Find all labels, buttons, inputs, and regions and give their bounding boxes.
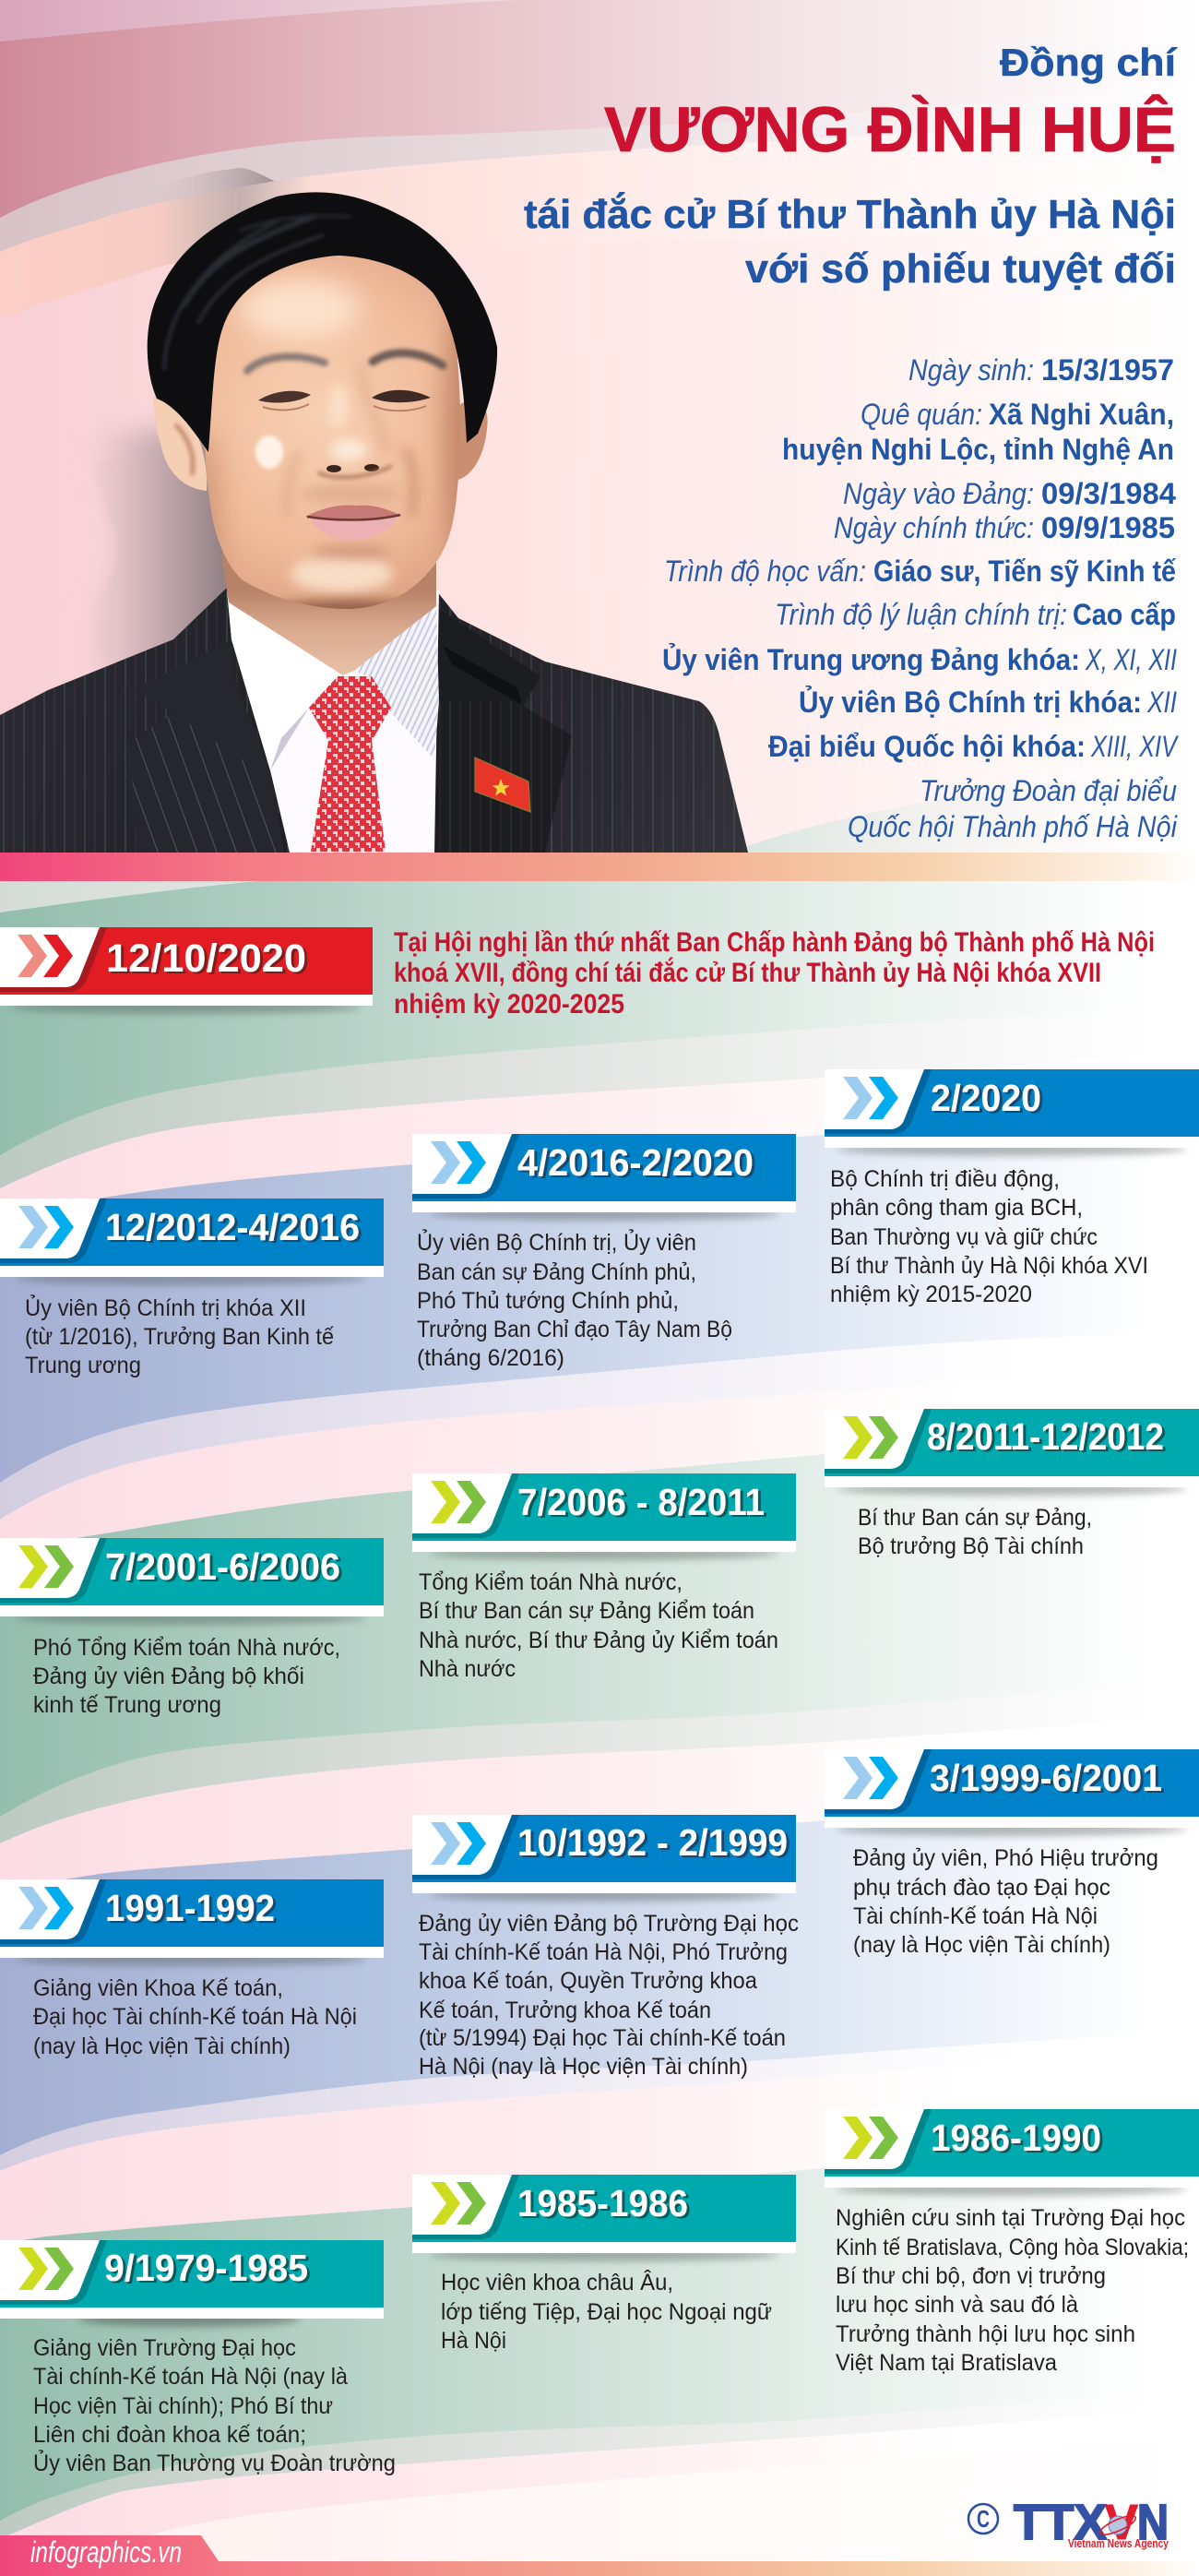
description: Giảng viên Trường Đại học [33, 2335, 296, 2361]
entry: 7/2001-6/2006 [0, 1538, 384, 1718]
badge [412, 1815, 796, 1902]
title: Đồng chí: Đồng chí [1000, 41, 1177, 84]
subtitle [524, 191, 1176, 292]
badge: 7/2001-6/2006 [105, 1545, 340, 1588]
description: Phó Tổng Kiểm toán Nhà nước, [33, 1635, 340, 1661]
description [33, 1975, 357, 2059]
badge: 2/2020 [931, 1077, 1041, 1119]
description: (từ 5/1994) Đại học Tài chính-Kế toán [419, 2025, 786, 2051]
description: Đảng ủy viên Đảng bộ khối [33, 1664, 304, 1689]
description [419, 1911, 799, 2080]
badge [412, 2175, 796, 2261]
logo: TTXVN [968, 2495, 1169, 2550]
description: Nhà nước [419, 1656, 516, 1682]
neck [221, 554, 436, 675]
badge: 1986-1990 [931, 2117, 1101, 2159]
description: Trưởng thành hội lưu học sinh [836, 2321, 1135, 2347]
nose and highlights [255, 384, 392, 477]
globe [1098, 2512, 1138, 2538]
necktie [309, 676, 391, 852]
entry: 12/10/2020 [0, 927, 1155, 1020]
entry: 12/2012-4/2016 [0, 1199, 384, 1378]
panel: biography facts: XII [1146, 686, 1177, 719]
left ear [153, 395, 207, 491]
source tab [0, 2535, 219, 2576]
badge: 1991-1992 [105, 1887, 275, 1929]
description: phụ trách đào tạo Đại học [853, 1875, 1110, 1901]
description: Trung ương [25, 1353, 141, 1378]
description: Đại học Tài chính-Kế toán Hà Nội [33, 2004, 357, 2030]
description: Hà Nội [441, 2328, 506, 2354]
description: Tài chính-Kế toán Hà Nội [853, 1903, 1098, 1929]
panel: biography facts: Ủy viên Bộ Chính trị khóa: [799, 686, 1142, 719]
headline text [394, 927, 1155, 1020]
illustration: portrait [0, 192, 756, 853]
entry: 4/2016-2/2020 [412, 1134, 796, 1371]
entry: 1986-1990 [825, 2109, 1199, 2376]
description: Nghiên cứu sinh tại Trường Đại học [836, 2205, 1185, 2231]
panel: biography facts: Quê quán: [861, 398, 982, 431]
entry: 2/2020 [825, 1069, 1199, 1307]
description: Bí thư Ban cán sự Đảng Kiểm toán [419, 1598, 754, 1624]
badge: 1985-1986 [517, 2182, 688, 2224]
badge: 12/10/2020 [0, 927, 373, 1014]
description: Ủy viên Bộ Chính trị khóa XII [25, 1294, 306, 1321]
subtitle: với số phiếu tuyệt đối [745, 246, 1176, 292]
panel: biography facts: Trưởng Đoàn đại biểu [920, 774, 1177, 807]
description [33, 2335, 396, 2476]
panel: biography facts: Đại biểu Quốc hội khóa: [768, 730, 1086, 763]
panel: biography facts: 09/3/1984 [1041, 477, 1176, 510]
entry: 1985-1986 [412, 2175, 796, 2354]
jacket [0, 588, 756, 853]
description: khoa Kế toán, Quyền Trưởng khoa [419, 1968, 757, 1994]
description [836, 2205, 1189, 2376]
entry: 8/2011-12/2012 [825, 1409, 1199, 1559]
subtitle: tái đắc cử Bí thư Thành ủy Hà Nội [524, 191, 1176, 237]
entry: 9/1979-1985 [0, 2240, 396, 2476]
badge: 12/2012-4/2016 [105, 1206, 360, 1248]
headline text: nhiệm kỳ 2020-2025 [394, 989, 624, 1020]
badge [825, 1409, 1199, 1496]
badge [412, 1473, 796, 1560]
description: kinh tế Trung ương [33, 1692, 221, 1718]
description: (từ 1/2016), Trưởng Ban Kinh tế [25, 1324, 334, 1350]
title block [524, 41, 1177, 292]
description: Nhà nước, Bí thư Đảng ủy Kiểm toán [419, 1628, 778, 1653]
badge [825, 1069, 1199, 1156]
panel: header background [0, 0, 1199, 853]
description: Bí thư Ban cán sự Đảng, [858, 1505, 1092, 1531]
description: (nay là Học viện Tài chính) [853, 1932, 1110, 1958]
description: lớp tiếng Tiệp, Đại học Ngoại ngữ [441, 2299, 772, 2325]
panel: biography facts: Xã Nghi Xuân, [989, 398, 1174, 431]
badge [0, 1538, 384, 1625]
footer bar [0, 2535, 1199, 2576]
description [33, 1635, 340, 1718]
description: Liên chi đoàn khoa kế toán; [33, 2422, 306, 2448]
hair [148, 192, 497, 452]
badge: 7/2006 - 8/2011 [517, 1481, 765, 1523]
panel: biography facts: Ngày vào Đảng: [843, 477, 1034, 510]
mouth [305, 506, 402, 541]
wordmark: N [1137, 2495, 1169, 2550]
panel: biography facts: Cao cấp [1073, 598, 1176, 631]
panel: biography facts: 09/9/1985 [1041, 511, 1175, 544]
title: name: VƯƠNG ĐÌNH HUỆ [604, 94, 1176, 165]
panel: biography facts: Ngày chính thức: [834, 511, 1034, 544]
description: Tài chính-Kế toán Hà Nội, Phó Trưởng [419, 1939, 788, 1965]
description: Bộ trưởng Bộ Tài chính [858, 1533, 1084, 1559]
badge [825, 1749, 1199, 1836]
description: phân công tham gia BCH, [830, 1195, 1083, 1221]
badge [0, 2240, 384, 2327]
copyright mark: C [977, 2505, 990, 2533]
badge [825, 2109, 1199, 2196]
panel: biography facts: X, XI, XII [1085, 643, 1177, 676]
description: Bí thư chi bộ, đơn vị trưởng [836, 2263, 1106, 2289]
description: Việt Nam tại Bratislava [836, 2350, 1057, 2376]
description [441, 2269, 772, 2354]
description: Kế toán, Trưởng khoa Kế toán [419, 1998, 711, 2023]
badge: 3/1999-6/2001 [930, 1757, 1162, 1799]
copyright mark [968, 2504, 998, 2534]
description: nhiệm kỳ 2015-2020 [830, 1282, 1032, 1307]
panel: biography facts: 15/3/1957 [1041, 353, 1174, 387]
description: Bộ Chính trị điều động, [830, 1166, 1060, 1192]
gradient divider bar [0, 853, 1199, 881]
entry: 10/1992 - 2/1999 [412, 1815, 799, 2080]
eyes [258, 390, 431, 411]
entry: 1991-1992 [0, 1879, 384, 2059]
description [858, 1505, 1092, 1559]
description: Ban cán sự Đảng Chính phủ, [417, 1259, 696, 1285]
badge: 4/2016-2/2020 [517, 1141, 754, 1184]
panel: biography facts: Trình độ lý luận chính trị: [775, 598, 1067, 631]
description: Hà Nội (nay là Học viện Tài chính) [419, 2054, 748, 2080]
right ear [458, 400, 488, 480]
lapel flag pin [475, 757, 530, 812]
panel: biography facts: Ủy viên Trung ương Đảng khóa: [662, 643, 1080, 676]
eyebrows [247, 353, 443, 371]
panel: timeline background swooshes [0, 881, 1199, 2576]
face [205, 256, 460, 609]
panel: biography facts [662, 353, 1179, 843]
description: Tài chính-Kế toán Hà Nội (nay là [33, 2364, 348, 2390]
description: Tổng Kiểm toán Nhà nước, [419, 1569, 683, 1595]
description: Học viện Tài chính); Phó Bí thư [33, 2393, 333, 2419]
agency name: Vietnam News Agency [1068, 2536, 1169, 2550]
source tab: infographics.vn [30, 2535, 182, 2569]
description: Trưởng Ban Chỉ đạo Tây Nam Bộ [417, 1317, 732, 1342]
description: (tháng 6/2016) [417, 1345, 564, 1371]
description [830, 1166, 1148, 1307]
description: Giảng viên Khoa Kế toán, [33, 1975, 283, 2001]
description [417, 1228, 732, 1371]
entry: 7/2006 - 8/2011 [412, 1473, 796, 1682]
description: Học viên khoa châu Âu, [441, 2269, 673, 2296]
description: Ủy viên Bộ Chính trị, Ủy viên [417, 1228, 696, 1256]
badge [0, 1199, 384, 1285]
shirt and collar [227, 588, 439, 853]
description: (nay là Học viện Tài chính) [33, 2033, 291, 2059]
description: Ban Thường vụ và giữ chức [830, 1224, 1098, 1250]
description [853, 1845, 1158, 1958]
description: lưu học sinh và sau đó là [836, 2292, 1078, 2318]
panel: biography facts: huyện Nghi Lộc, tỉnh Nghệ An [782, 433, 1174, 466]
description [25, 1294, 334, 1378]
badge: 8/2011-12/2012 [927, 1415, 1164, 1458]
wordmark [1014, 2495, 1169, 2550]
wordmark: V [1105, 2495, 1138, 2550]
description: Bí thư Thành ủy Hà Nội khóa XVI [830, 1253, 1148, 1279]
badge [412, 1134, 796, 1221]
entry: 3/1999-6/2001 [825, 1749, 1199, 1958]
description: Đảng ủy viên Đảng bộ Trường Đại học [419, 1911, 799, 1937]
panel: biography facts: Ngày sinh: [908, 353, 1034, 387]
description: Phó Thủ tướng Chính phủ, [417, 1288, 679, 1314]
panel: biography facts: Trình độ học vấn: [664, 555, 866, 588]
badge: 10/1992 - 2/1999 [517, 1821, 788, 1864]
badge [0, 1879, 384, 1966]
badge: 12/10/2020: 12/10/2020 [106, 936, 306, 981]
description: Ủy viên Ban Thường vụ Đoàn trường [33, 2449, 396, 2476]
description: Đảng ủy viên, Phó Hiệu trưởng [853, 1845, 1158, 1871]
description [419, 1569, 778, 1682]
badge: 9/1979-1985 [104, 2247, 308, 2289]
wordmark: TTX [1014, 2495, 1107, 2550]
panel: biography facts: XIII, XIV [1090, 730, 1179, 763]
